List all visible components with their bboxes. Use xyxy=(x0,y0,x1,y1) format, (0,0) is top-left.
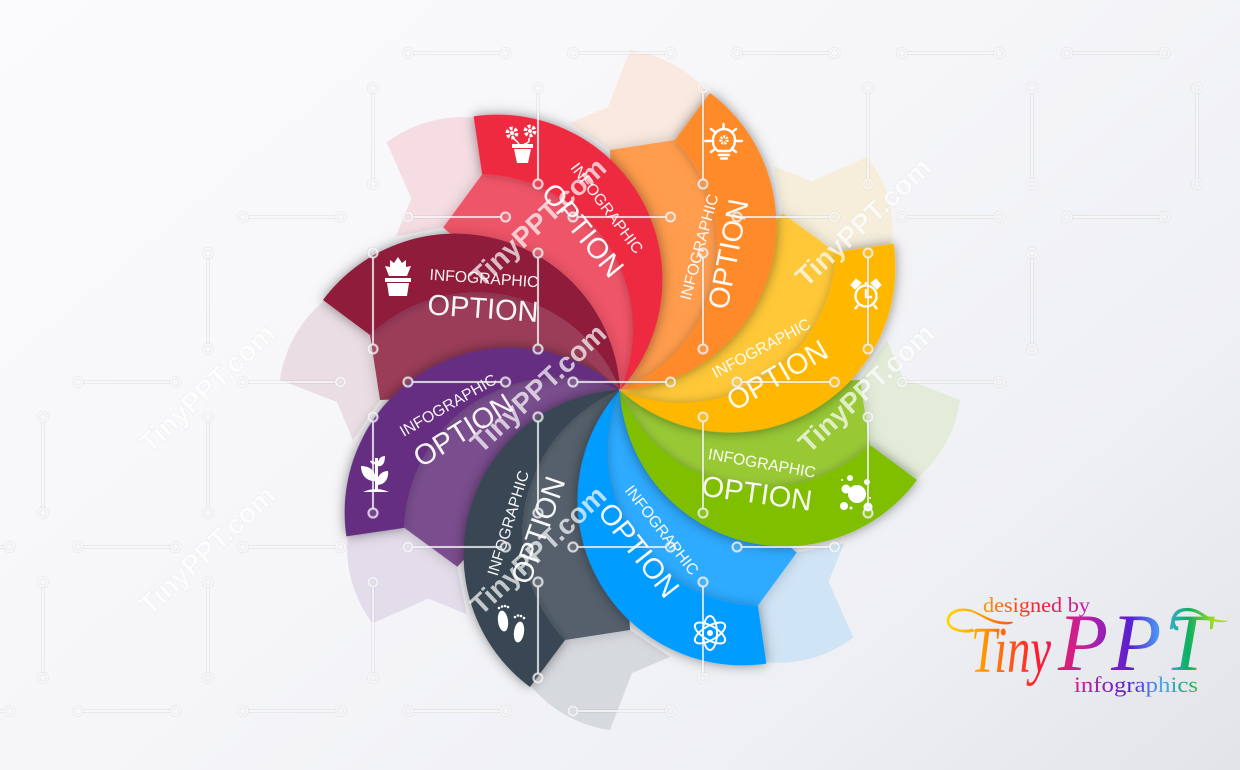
watermarks: TinyPPT.com xyxy=(789,152,937,293)
petal: green xyxy=(620,380,917,546)
label: orange option: INFOGRAPHIC xyxy=(678,192,722,302)
petal: purple xyxy=(299,279,627,607)
watermarks: TinyPPT.com xyxy=(464,480,612,621)
petal: yellow xyxy=(613,173,941,501)
petal: maroon xyxy=(323,234,620,400)
icon: sprout xyxy=(361,456,389,492)
icon: light bulb xyxy=(705,124,742,158)
label: red option: OPTION xyxy=(535,177,630,284)
label: maroon option: OPTION xyxy=(426,289,539,329)
label: green option: INFOGRAPHIC xyxy=(707,446,817,482)
label: blue option: OPTION xyxy=(591,497,685,604)
watermarks: TinyPPT.com xyxy=(133,480,281,621)
label: slate option: OPTION xyxy=(506,473,572,588)
logo: designed by TinyPPT infographics xyxy=(947,593,1228,697)
label: green option xyxy=(700,446,817,518)
label: maroon option xyxy=(426,267,539,329)
logo: designed by TinyPPT infographics: infographics xyxy=(1074,672,1198,697)
label: maroon option: INFOGRAPHIC xyxy=(429,267,539,291)
logo: designed by TinyPPT infographics: PPT xyxy=(1057,597,1215,688)
petal: slate xyxy=(464,390,630,687)
label: yellow option: OPTION xyxy=(721,334,834,418)
watermarks: TinyPPT.com xyxy=(464,318,612,459)
petal: red xyxy=(441,106,671,389)
label: purple option: OPTION xyxy=(408,388,519,474)
watermarks: TinyPPT.com xyxy=(792,318,940,459)
label: yellow option: INFOGRAPHIC xyxy=(709,316,814,382)
logo: designed by TinyPPT infographics: designed by xyxy=(983,593,1091,617)
icon: bubbles xyxy=(840,475,872,512)
label: red option: INFOGRAPHIC xyxy=(567,160,646,257)
ghost petals behind the wheel xyxy=(280,50,960,730)
petal: orange xyxy=(610,93,776,390)
maroon petal edge overlapping red xyxy=(445,228,624,390)
watermarks: TinyPPT.com xyxy=(133,318,281,459)
label: slate option: INFOGRAPHIC xyxy=(485,469,533,578)
icon: flower pot xyxy=(507,126,535,163)
logo: designed by TinyPPT infographics: Tiny xyxy=(971,614,1051,687)
label: blue option: INFOGRAPHIC xyxy=(621,482,701,579)
label: green option: OPTION xyxy=(700,471,814,518)
watermarks: TinyPPT.com xyxy=(464,152,612,293)
watermarks xyxy=(133,152,940,621)
icon: succulent in pot xyxy=(385,257,411,296)
petal: blue xyxy=(509,383,837,711)
label: purple option: INFOGRAPHIC xyxy=(397,371,500,440)
label: orange option xyxy=(678,192,755,312)
icon: atom xyxy=(692,616,728,650)
icon: alarm clock xyxy=(851,279,881,309)
icon: footprints xyxy=(497,605,525,643)
label: orange option: OPTION xyxy=(703,197,755,312)
